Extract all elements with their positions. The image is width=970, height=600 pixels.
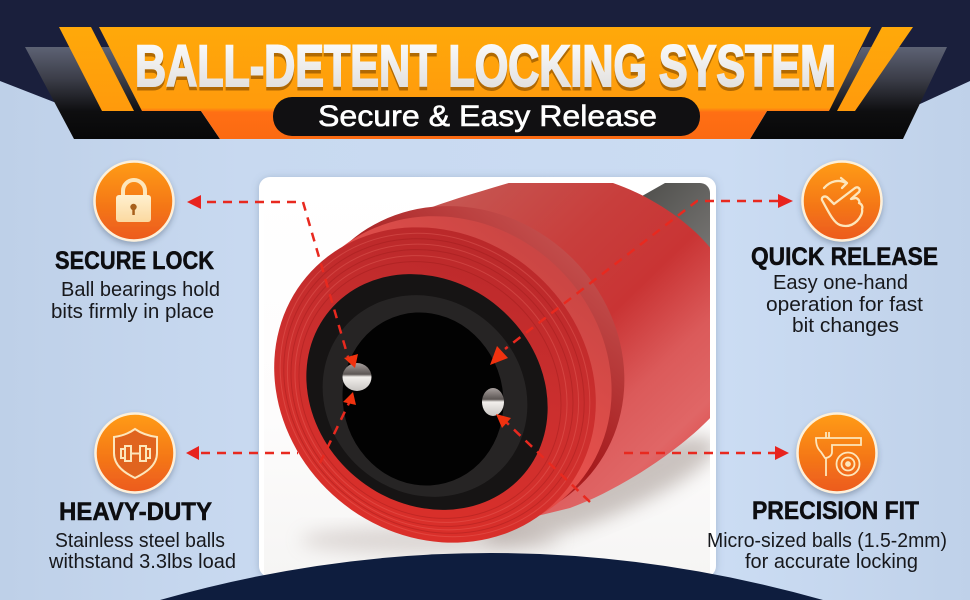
photo panel xyxy=(256,175,719,576)
callout arrow: secure lock xyxy=(187,195,358,368)
banner centre orange panel xyxy=(99,27,871,139)
description: for accurate locking xyxy=(745,551,918,573)
description: operation for fast xyxy=(766,294,923,316)
heading: SECURE LOCK xyxy=(55,247,214,275)
bottom navy arc xyxy=(160,553,823,600)
icon: hand with arrow xyxy=(802,162,882,240)
subtitle: Secure & Easy Release xyxy=(318,100,657,133)
callout arrow: quick release xyxy=(490,194,793,365)
photo frame xyxy=(259,177,716,577)
heading: HEAVY-DUTY xyxy=(59,498,212,526)
handle xyxy=(642,183,710,248)
ground shadow xyxy=(482,428,710,552)
banner left dark back panel xyxy=(25,47,220,139)
feature: heavy-duty xyxy=(48,414,236,573)
feature: precision fit xyxy=(707,414,947,573)
callout arrow: heavy-duty xyxy=(186,392,356,463)
lathe rings xyxy=(280,232,590,538)
heading: QUICK RELEASE xyxy=(751,243,938,271)
icon: padlock xyxy=(94,162,174,240)
heading: PRECISION FIT xyxy=(752,497,919,525)
icon: shield with dumbbell xyxy=(96,414,174,492)
description: Micro-sized balls (1.5-2mm) xyxy=(707,530,947,552)
description: Stainless steel balls xyxy=(55,530,225,552)
subtitle pill xyxy=(273,97,700,136)
description: withstand 3.3lbs load xyxy=(48,551,236,573)
front rim xyxy=(274,228,596,543)
description: bit changes xyxy=(792,315,899,337)
product photo: red bit holder xyxy=(264,183,710,575)
black collar xyxy=(306,274,548,510)
banner right dark back panel xyxy=(750,47,947,139)
description: Easy one-hand xyxy=(773,272,908,294)
feature: quick release xyxy=(751,162,938,337)
description: Ball bearings hold xyxy=(61,279,220,301)
cylinder body xyxy=(432,183,710,516)
shoulder light band xyxy=(342,216,612,514)
icon: caliper and target xyxy=(798,414,876,492)
feature: secure lock xyxy=(51,162,220,323)
left steel ball xyxy=(342,363,372,391)
banner right orange strip xyxy=(837,27,913,111)
shoulder dark band xyxy=(348,206,624,501)
right steel ball xyxy=(482,388,504,416)
callout arrow: precision fit xyxy=(496,414,789,502)
bore xyxy=(342,312,504,486)
title banner xyxy=(25,27,947,139)
dark navy top band xyxy=(0,0,970,104)
banner left orange strip xyxy=(59,27,134,111)
description: bits firmly in place xyxy=(51,301,214,323)
